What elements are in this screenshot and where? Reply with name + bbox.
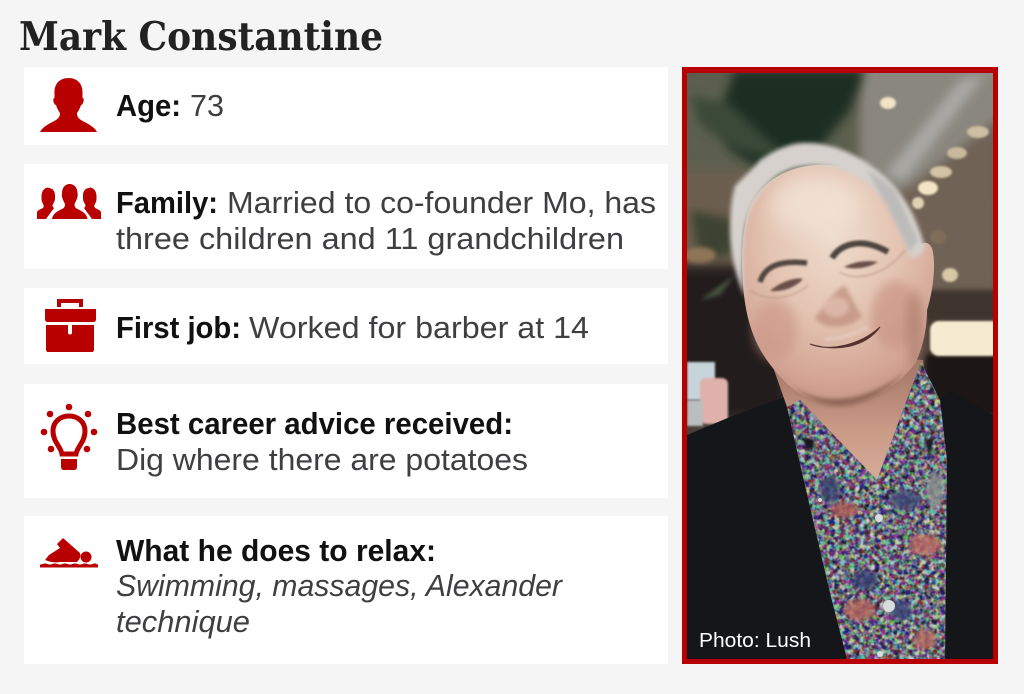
first job text	[116, 310, 589, 345]
advice text: Best career advice received:	[116, 406, 513, 441]
photo: portrait of Mark Constantine	[687, 73, 993, 659]
relax text: Swimming, massages, Alexander	[116, 568, 564, 603]
panel: first job	[24, 288, 668, 364]
panel: age	[24, 67, 668, 145]
palm	[720, 70, 865, 175]
icon: family	[37, 184, 101, 219]
jacket	[687, 390, 993, 659]
glasses	[750, 250, 905, 298]
relax text: technique	[116, 604, 250, 639]
eyebrows	[760, 262, 807, 282]
family text: Married to co-founder Mo, has	[227, 185, 656, 220]
icon: person	[40, 78, 97, 132]
hair	[730, 143, 925, 297]
panel: family	[24, 164, 668, 269]
family text: Family:	[116, 185, 218, 220]
relax text: What he does to relax:	[116, 533, 436, 568]
photo credit: Photo: Lush	[699, 630, 811, 652]
lights	[880, 97, 1000, 356]
first job text: First job:	[116, 310, 241, 345]
age text: 73	[190, 88, 224, 123]
mouth	[810, 327, 880, 348]
family text	[116, 185, 656, 256]
title: Mark Constantine	[19, 14, 383, 60]
icon: light bulb	[41, 404, 97, 470]
neck	[774, 360, 924, 480]
panel: portrait photo	[670, 60, 1010, 664]
advice text	[116, 406, 528, 477]
icon: briefcase	[45, 299, 96, 352]
eyes	[770, 279, 803, 291]
icon: swimmer	[40, 538, 98, 568]
family text: three children and 11 grandchildren	[116, 221, 624, 256]
advice text: Dig where there are potatoes	[116, 442, 528, 477]
age text	[116, 88, 224, 123]
panel: relax	[24, 516, 668, 664]
shirt	[780, 360, 955, 660]
age text: Age:	[116, 88, 181, 123]
first job text: Worked for barber at 14	[249, 310, 589, 345]
panel: career advice	[24, 384, 668, 498]
face	[730, 143, 934, 406]
collar shadows	[800, 437, 815, 452]
nose	[815, 285, 862, 327]
relax text	[116, 533, 564, 639]
background	[687, 73, 993, 428]
